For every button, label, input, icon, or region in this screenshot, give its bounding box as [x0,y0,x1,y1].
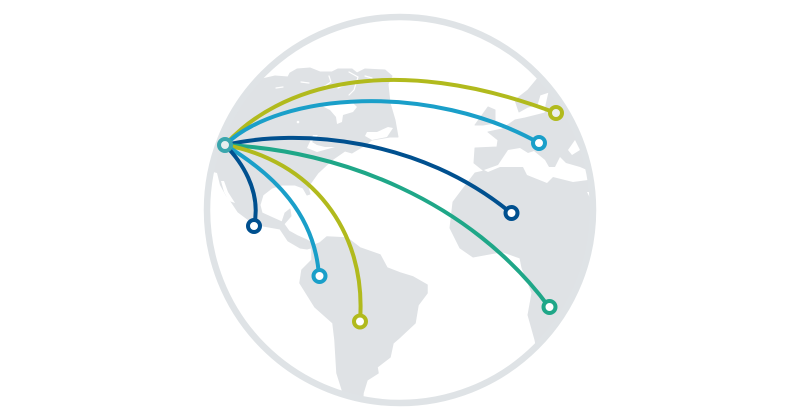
route: to central South America [225,145,361,321]
route: to Central America [225,145,256,226]
marker: origin [219,139,231,151]
world map landmasses [214,68,590,396]
marker: Central America [248,220,260,232]
Mediterranean Sea [484,148,588,183]
small lake [297,121,299,123]
route: to southern Europe [225,101,539,145]
route: to northern South America [225,145,319,276]
Great Lakes [307,135,335,152]
route: to northern Europe [225,80,556,145]
Arctic channels [276,72,372,95]
Black Sea [568,140,580,155]
Gulf of St Lawrence [365,127,393,140]
marker: West Africa [506,207,518,219]
globe outline ring [207,17,593,403]
marker: northern South America [314,270,326,282]
globe infographic [204,14,596,406]
land: South America [300,237,427,410]
marker: northern Europe [550,107,562,119]
land: Baja California gap [212,172,224,192]
route: to West Africa [225,138,511,213]
route: to southern Africa [225,145,549,307]
land: Europe, Africa and Asia [450,78,590,343]
Red Sea [587,192,590,196]
marker: southern Europe [533,137,545,149]
location markers [219,107,562,328]
land: North and Central America [200,68,398,249]
Gulf of California [221,181,235,203]
marker: southern Africa [544,301,556,313]
land: British Isles [475,107,495,125]
marker: central South America [354,316,366,328]
route arcs [225,80,556,321]
Hudson Bay [324,104,357,124]
